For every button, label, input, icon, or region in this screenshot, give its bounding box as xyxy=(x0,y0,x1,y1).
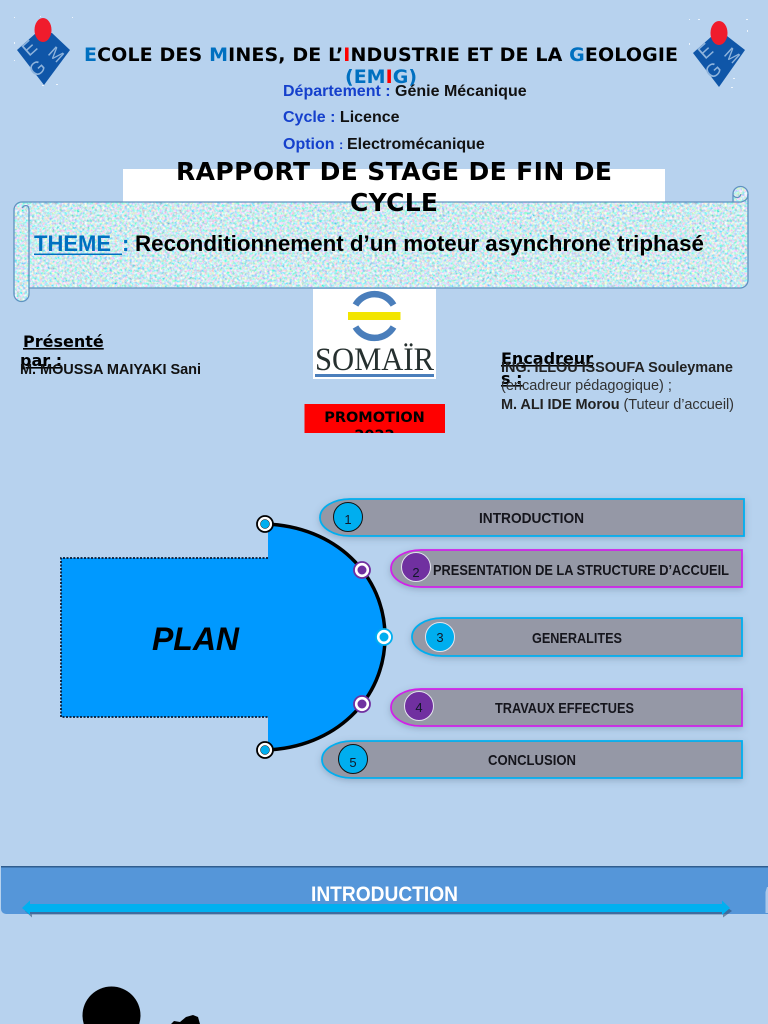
icon: left EMIG logo: M xyxy=(44,43,68,66)
item 1: introduction xyxy=(320,499,744,536)
heading: school acronym: (EMIG) xyxy=(345,66,417,88)
plan label: PLAN xyxy=(152,621,240,657)
item 4: travaux effectues xyxy=(391,689,742,726)
icon: right EMIG logo: M xyxy=(720,44,744,67)
item 3: generalites: GENERALITES xyxy=(532,630,622,647)
heading: school name: ECOLE DES MINES, DE L’INDUSTRIE ET DE LA GEOLOGIE xyxy=(84,44,678,66)
text block: supervisors: M. ALI IDE Morou (Tuteur d’accueil) xyxy=(501,397,734,413)
title xyxy=(176,157,612,217)
text block: supervisors xyxy=(501,349,734,413)
item 5: conclusion: 5 xyxy=(349,755,357,770)
node markers on arc xyxy=(257,516,392,758)
theme text: : xyxy=(122,231,129,256)
item 4: travaux effectues: 4 xyxy=(415,700,423,715)
icon: left EMIG logo: G xyxy=(25,56,50,82)
text block: presented by: M. MOUSSA MAIYAKI Sani xyxy=(20,362,201,378)
text block: department, cycle, option xyxy=(283,83,527,153)
item 3: generalites: 3 xyxy=(436,630,444,645)
text block: supervisors: (encadreur pédagogique) ; xyxy=(501,378,672,394)
icon: right EMIG logo xyxy=(689,19,748,88)
title: CYCLE xyxy=(350,188,438,217)
item 2: presentation: 2 xyxy=(412,565,420,580)
item 5: conclusion: CONCLUSION xyxy=(488,752,576,769)
item 5: conclusion xyxy=(322,741,742,778)
icon: right EMIG logo: G xyxy=(701,58,726,84)
text block: supervisors: s : xyxy=(501,369,522,388)
item 1: introduction: INTRODUCTION xyxy=(479,510,584,527)
icon: black figure silhouette xyxy=(82,986,200,1024)
text block: supervisors: Encadreur xyxy=(501,349,593,368)
item 2: presentation xyxy=(391,550,742,587)
badge: promotion xyxy=(304,404,445,433)
title panel xyxy=(123,169,665,202)
item 3: generalites xyxy=(412,618,742,656)
logo: SOMAIR xyxy=(313,289,436,379)
icon: right EMIG logo: E xyxy=(694,40,718,64)
text block: department, cycle, option: Option : xyxy=(283,136,343,153)
banner label: INTRODUCTION xyxy=(311,883,458,906)
item 1: introduction: 1 xyxy=(344,512,352,527)
theme text: Reconditionnement d’un moteur asynchrone triphasé xyxy=(135,231,704,256)
icon: left EMIG logo xyxy=(14,16,73,86)
badge: promotion: PROMOTION xyxy=(324,410,425,426)
item 4: travaux effectues: TRAVAUX EFFECTUES xyxy=(495,700,634,717)
text block: department, cycle, option: Cycle : Licence xyxy=(283,109,400,126)
arrow: double-headed xyxy=(22,900,732,918)
text block: department, cycle, option: Département : Génie Mécanique xyxy=(283,83,527,100)
banner: theme scroll xyxy=(14,187,748,302)
badge: promotion: 2022 xyxy=(354,428,395,444)
text block: presented by: par : xyxy=(20,351,62,370)
text block: presented by xyxy=(20,332,201,378)
text block: presented by: Présenté xyxy=(23,332,104,351)
text block: supervisors: ING. ILLOU ISSOUFA Souleymane xyxy=(501,360,733,376)
logo: SOMAIR: SOMAÏR xyxy=(315,342,434,378)
icon: left EMIG logo: E xyxy=(18,37,42,61)
theme text: THEME xyxy=(34,231,111,256)
text block: department, cycle, option: Electromécanique xyxy=(347,136,485,153)
section banner: introduction xyxy=(1,866,768,918)
plan shape xyxy=(61,524,385,750)
title: RAPPORT DE STAGE DE FIN DE xyxy=(176,157,612,186)
